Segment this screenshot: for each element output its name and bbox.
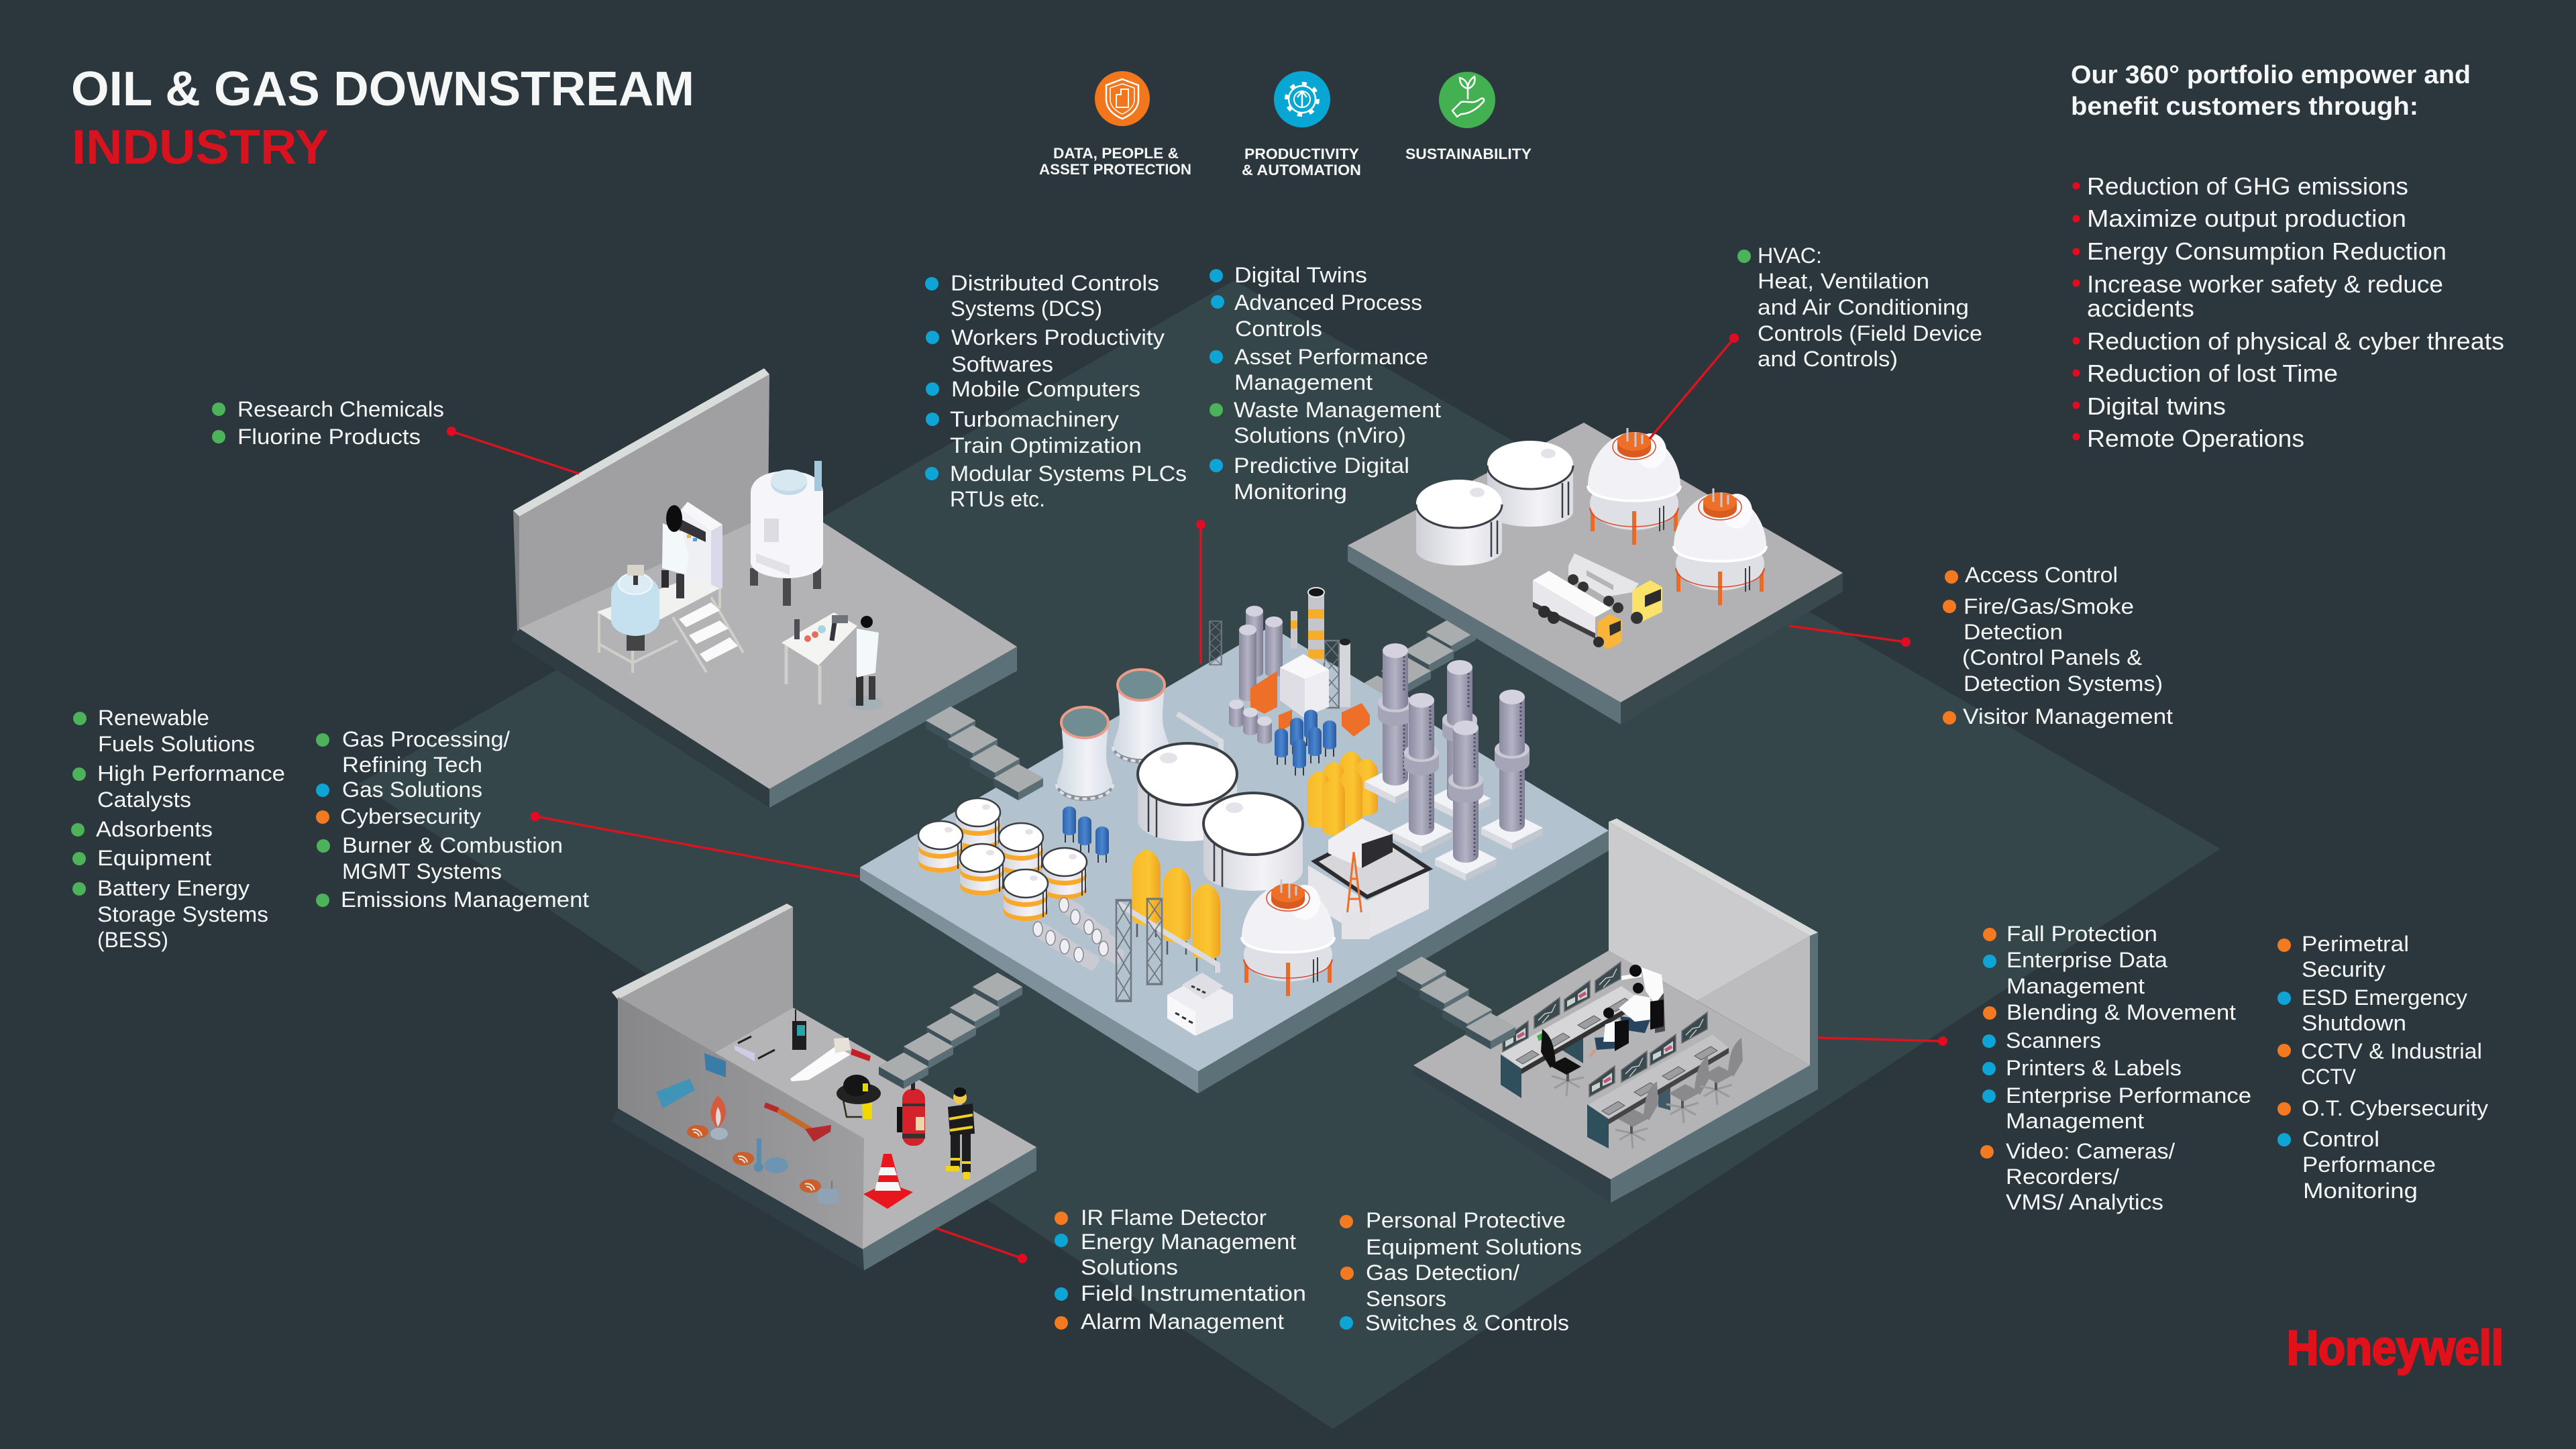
radio and goggles bbox=[735, 1010, 806, 1061]
list: digital bbox=[1210, 263, 1441, 504]
platform base bbox=[1413, 1065, 1611, 1203]
list: controls and software: Systems (DCS) bbox=[951, 297, 1102, 321]
substation bbox=[1308, 818, 1429, 939]
list: enterprise and video: Scanners bbox=[2006, 1028, 2101, 1053]
steps: safety platform to refinery bbox=[879, 973, 1022, 1089]
icon: shield with building bbox=[1095, 71, 1150, 126]
list: security and control: Performance bbox=[2302, 1152, 2436, 1177]
list: enterprise and video: Recorders/ bbox=[2006, 1165, 2119, 1189]
panel: safety equipment platform bbox=[612, 904, 1036, 1271]
list: gas processing: Gas Processing/ bbox=[342, 727, 510, 751]
sensor: flame bbox=[687, 1095, 728, 1140]
equipment: control cabinet bbox=[680, 502, 722, 590]
list: enterprise and video: Fall Protection bbox=[2006, 922, 2157, 946]
flare stacks bbox=[1291, 588, 1350, 707]
label: productivity and automation: PRODUCTIVITY bbox=[1244, 146, 1359, 162]
firefighter bbox=[946, 1087, 975, 1179]
platform base bbox=[1348, 545, 1621, 724]
list: digital: Solutions (nViro) bbox=[1234, 423, 1406, 447]
list: controls and software: Mobile Computers bbox=[951, 377, 1140, 401]
list: detection and energy: Alarm Management bbox=[1081, 1309, 1284, 1334]
list: security and control bbox=[2277, 932, 2488, 1203]
equipment: blue tank bbox=[611, 565, 659, 651]
process buildings bbox=[1250, 654, 1370, 737]
list: hvac: Heat, Ventilation bbox=[1758, 269, 1929, 293]
list: security and control: Perimetral bbox=[2302, 932, 2409, 956]
steps: lab to refinery bbox=[926, 706, 1043, 800]
list: security and control: Shutdown bbox=[2302, 1011, 2406, 1035]
label: productivity and automation bbox=[1242, 146, 1361, 178]
list: detection and energy: Solutions bbox=[1081, 1255, 1178, 1279]
list: detection and energy: Field Instrumentation bbox=[1081, 1281, 1306, 1305]
leader line: hvac bbox=[1650, 333, 1739, 439]
steps: control room to refinery bbox=[1397, 957, 1515, 1049]
title: OIL & GAS DOWNSTREAM bbox=[71, 62, 694, 116]
ppe: gloves and mask bbox=[656, 1053, 726, 1108]
list: controls and software: Distributed Controls bbox=[951, 271, 1159, 295]
leader line: refinery top bbox=[1196, 520, 1205, 664]
list: protective equipment: Gas Detection/ bbox=[1366, 1260, 1519, 1285]
platform floor bbox=[1348, 423, 1843, 702]
list: renewable and catalysts: High Performance bbox=[97, 761, 285, 786]
pipe run and lattices bbox=[1116, 899, 1218, 1001]
list: chemicals: Fluorine Products bbox=[237, 425, 421, 449]
list: access and detection: Detection Systems) bbox=[1964, 672, 2163, 696]
list: controls and software: Train Optimization bbox=[950, 433, 1142, 458]
list: enterprise and video: Blending & Movement bbox=[2006, 1000, 2236, 1024]
list: enterprise and video: Management bbox=[2006, 1109, 2144, 1133]
sensor: temperature bbox=[733, 1138, 788, 1173]
consoles: front row bbox=[1587, 1012, 1729, 1148]
list: access and detection: Detection bbox=[1964, 620, 2063, 644]
logo: Honeywell: Honeywell bbox=[2287, 1322, 2504, 1375]
list: controls and software: Workers Productivity bbox=[951, 325, 1165, 350]
leader line: tank farm bbox=[1789, 626, 1911, 647]
list: security and control: Security bbox=[2302, 957, 2385, 981]
list: protective equipment: Switches & Controls bbox=[1365, 1311, 1569, 1335]
list: gas processing: MGMT Systems bbox=[342, 859, 502, 883]
spherical tanks bbox=[1588, 428, 1766, 605]
list: benefits bbox=[2073, 172, 2504, 452]
list: gas processing: Gas Solutions bbox=[342, 777, 482, 802]
hose nozzle bbox=[790, 1038, 871, 1081]
small utility building bbox=[1167, 973, 1233, 1036]
list: enterprise and video: Printers & Labels bbox=[2006, 1056, 2182, 1080]
operators bbox=[1590, 965, 1665, 1057]
legend: portfolio pillars bbox=[1039, 71, 1532, 178]
heading: portfolio benefits bbox=[2071, 61, 2471, 121]
list: hvac: and Air Conditioning bbox=[1758, 295, 1969, 319]
list: hvac: and Controls) bbox=[1758, 347, 1898, 371]
platform floor bbox=[860, 627, 1609, 1071]
list: renewable and catalysts: Equipment bbox=[97, 846, 211, 870]
list: renewable and catalysts: Renewable bbox=[98, 706, 209, 730]
list: benefits: Energy Consumption Reduction bbox=[2087, 237, 2447, 265]
list: detection and energy bbox=[1055, 1205, 1306, 1334]
list: enterprise and video: VMS/ Analytics bbox=[2006, 1190, 2163, 1214]
yellow vessels bbox=[1132, 850, 1220, 971]
list: renewable and catalysts: Storage Systems bbox=[97, 902, 268, 926]
figure: technician at cabinet bbox=[661, 505, 689, 598]
heading: portfolio benefits: Our 360° portfolio empower and bbox=[2071, 61, 2471, 89]
heading: portfolio benefits: benefit customers through: bbox=[2071, 93, 2418, 121]
panel: main refinery platform bbox=[860, 588, 1609, 1093]
list: access and detection: (Control Panels & bbox=[1962, 645, 2142, 669]
list: security and control: O.T. Cybersecurity bbox=[2302, 1096, 2488, 1120]
traffic cone bbox=[863, 1154, 913, 1209]
blue vessels cluster bbox=[1275, 710, 1336, 775]
list: gas processing: Refining Tech bbox=[342, 753, 482, 777]
list: enterprise and video: Enterprise Performance bbox=[2006, 1083, 2251, 1108]
list: protective equipment: Sensors bbox=[1366, 1287, 1446, 1311]
list: controls and software: Softwares bbox=[951, 352, 1053, 376]
panel: tank farm platform bbox=[1348, 423, 1843, 724]
list: controls and software bbox=[925, 271, 1187, 511]
equipment: storage vessel bbox=[750, 461, 823, 606]
title bbox=[71, 62, 694, 174]
list: security and control: Monitoring bbox=[2303, 1179, 2418, 1203]
leader line: control room bbox=[1818, 1036, 1947, 1046]
list: access and detection: Access Control bbox=[1965, 563, 2118, 587]
list: security and control: Control bbox=[2302, 1127, 2379, 1151]
figure: technician at bench bbox=[849, 616, 883, 710]
list: hvac: Controls (Field Device bbox=[1758, 321, 1982, 345]
background diamond bbox=[359, 280, 2220, 1429]
title: INDUSTRY bbox=[72, 121, 329, 174]
sensor: camera bbox=[800, 1179, 839, 1203]
list: enterprise and video: Video: Cameras/ bbox=[2006, 1139, 2175, 1163]
list: access and detection: Fire/Gas/Smoke bbox=[1964, 594, 2134, 619]
list: controls and software: Modular Systems PLCs bbox=[950, 462, 1187, 486]
list: benefits: Reduction of physical & cyber threats bbox=[2087, 327, 2504, 355]
icon: gear with arrow bbox=[1274, 71, 1330, 127]
list: digital: Digital Twins bbox=[1234, 263, 1367, 287]
list: enterprise and video: Enterprise Data bbox=[2006, 948, 2167, 972]
list: renewable and catalysts: Adsorbents bbox=[96, 817, 213, 841]
translucent wall bbox=[618, 997, 864, 1249]
list: enterprise and video: Management bbox=[2006, 974, 2145, 998]
label: data, people and asset protection: ASSET PROTECTION bbox=[1039, 161, 1191, 178]
leader line: lab bbox=[447, 427, 579, 474]
equipment: elevated stand bbox=[599, 588, 743, 673]
black chair bbox=[1541, 1029, 1584, 1096]
list: chemicals bbox=[212, 397, 444, 449]
label: productivity and automation: & AUTOMATION bbox=[1242, 162, 1361, 178]
icon: hand holding plant bbox=[1439, 72, 1495, 128]
list: security and control: CCTV & Industrial bbox=[2301, 1039, 2482, 1063]
list: digital: Management bbox=[1234, 370, 1373, 394]
consoles: back row bbox=[1501, 962, 1641, 1098]
list: controls and software: Turbomachinery bbox=[950, 407, 1119, 431]
list: benefits: Reduction of lost Time bbox=[2087, 360, 2338, 387]
grey chairs bbox=[1615, 1038, 1743, 1148]
list: chemicals: Research Chemicals bbox=[237, 397, 444, 421]
storage tanks bbox=[1416, 441, 1573, 566]
list: digital: Monitoring bbox=[1234, 480, 1347, 504]
list: digital: Predictive Digital bbox=[1234, 453, 1409, 478]
lattice towers bbox=[1210, 621, 1339, 708]
turbine cluster bbox=[1033, 898, 1126, 972]
back wall bbox=[1609, 822, 1810, 1001]
label: sustainability: SUSTAINABILITY bbox=[1405, 146, 1532, 162]
list: benefits: accidents bbox=[2087, 294, 2194, 322]
floor bbox=[1413, 951, 1810, 1179]
list: digital: Asset Performance bbox=[1234, 345, 1428, 369]
panel: lab platform bbox=[511, 368, 1017, 808]
helmet bbox=[837, 1075, 881, 1119]
list: security and control: ESD Emergency bbox=[2302, 985, 2467, 1010]
axe bbox=[765, 1105, 831, 1142]
list: gas processing: Emissions Management bbox=[341, 888, 589, 912]
list: hvac bbox=[1737, 244, 1982, 371]
list: protective equipment: Personal Protective bbox=[1366, 1208, 1566, 1232]
list: renewable and catalysts: Catalysts bbox=[97, 788, 191, 812]
yellow vessels cluster bbox=[1307, 751, 1378, 835]
distillation columns bbox=[1364, 643, 1543, 881]
platform base bbox=[860, 867, 1198, 1093]
platform base bbox=[511, 627, 769, 808]
small tanks with orange bands bbox=[918, 798, 1087, 921]
platform floor bbox=[517, 485, 1017, 789]
leader line: safety bbox=[936, 1228, 1027, 1263]
platform base bbox=[612, 1108, 864, 1271]
spherical tank bbox=[1242, 879, 1334, 996]
list: renewable and catalysts: Fuels Solutions bbox=[98, 732, 255, 756]
process columns bbox=[1239, 606, 1283, 701]
list: gas processing: Burner & Combustion bbox=[342, 833, 563, 857]
equipment: lab bench bbox=[782, 612, 857, 704]
large storage tanks bbox=[1138, 743, 1303, 891]
list: gas processing: Cybersecurity bbox=[340, 804, 481, 828]
list: digital: Advanced Process bbox=[1234, 290, 1422, 315]
list: renewable and catalysts: (BESS) bbox=[97, 928, 168, 952]
list: protective equipment bbox=[1340, 1208, 1582, 1335]
list: benefits: Digital twins bbox=[2087, 392, 2226, 420]
blue vessels bbox=[1063, 806, 1109, 863]
cooling towers bbox=[1057, 669, 1169, 801]
list: benefits: Maximize output production bbox=[2087, 205, 2406, 232]
list: hvac: HVAC: bbox=[1758, 244, 1822, 268]
panel: control room bbox=[1413, 818, 1818, 1203]
list: access and detection bbox=[1943, 563, 2173, 729]
tanker truck bbox=[1568, 553, 1662, 624]
pipe rack bbox=[1177, 714, 1221, 751]
label: data, people and asset protection bbox=[1039, 145, 1191, 178]
floor bbox=[618, 1008, 1036, 1249]
fire extinguisher bbox=[897, 1080, 925, 1146]
refinery units bbox=[918, 588, 1543, 1036]
leader line: refinery left bbox=[531, 812, 860, 877]
list: protective equipment: Equipment Solutions bbox=[1366, 1235, 1582, 1259]
list: benefits: Increase worker safety & reduce bbox=[2087, 270, 2443, 298]
list: detection and energy: Energy Management bbox=[1081, 1230, 1296, 1254]
list: security and control: CCTV bbox=[2301, 1065, 2357, 1089]
back wall bbox=[517, 374, 769, 629]
grey vessels bbox=[1229, 700, 1272, 744]
list: renewable and catalysts bbox=[71, 706, 285, 952]
list: renewable and catalysts: Battery Energy bbox=[97, 876, 250, 900]
list: enterprise and video bbox=[1980, 922, 2251, 1214]
list: digital: Controls bbox=[1235, 317, 1322, 341]
list: digital: Waste Management bbox=[1234, 398, 1441, 422]
list: access and detection: Visitor Management bbox=[1963, 704, 2173, 729]
steps: tank farm to refinery bbox=[1352, 618, 1476, 712]
list: benefits: Remote Operations bbox=[2087, 425, 2304, 452]
list: gas processing bbox=[316, 727, 589, 912]
label: data, people and asset protection: DATA, PEOPLE & bbox=[1053, 145, 1179, 162]
list: detection and energy: IR Flame Detector bbox=[1081, 1205, 1267, 1230]
box truck bbox=[1533, 571, 1622, 649]
list: benefits: Reduction of GHG emissions bbox=[2087, 172, 2408, 200]
back wall bbox=[618, 907, 793, 1108]
list: controls and software: RTUs etc. bbox=[950, 487, 1045, 511]
